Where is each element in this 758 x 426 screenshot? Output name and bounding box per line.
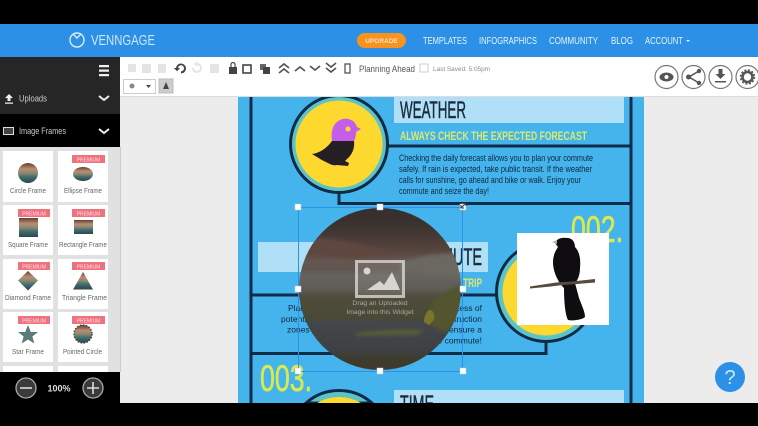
- navigation: TEMPLATES: [423, 35, 467, 47]
- logo: VENNGAGE: [91, 33, 155, 49]
- section 2 heading: COMMUTE: [407, 244, 482, 271]
- photo placeholder: [299, 208, 461, 370]
- icon: hamburger menu: [99, 65, 109, 76]
- image frames row: [0, 114, 120, 147]
- section 3 heading: TIME: [400, 391, 434, 418]
- uploaded bird photo: [517, 233, 609, 325]
- help button: ?: [724, 367, 736, 389]
- card: pointed circle: [58, 312, 108, 362]
- card: triangle frame: Triangle Frame: [62, 293, 107, 302]
- section 2 body text: [281, 303, 483, 346]
- navigation: COMMUNITY: [549, 35, 598, 47]
- card: pointed circle: Pointed Circle: [63, 347, 102, 356]
- card: circle frame: Circle Frame: [10, 186, 46, 195]
- uploads row: [5, 94, 109, 104]
- section 2 body text: truction: [454, 314, 482, 324]
- section 2 body text: ce commute!: [433, 336, 482, 346]
- card: ellipse frame: Ellipse Frame: [64, 186, 102, 195]
- sidebar scrollbar: [120, 147, 121, 372]
- card: rectangle frame: [58, 205, 108, 255]
- section 1 body text: calls for sunshine, go ahead and bike or walk. Enjoy your: [399, 175, 581, 185]
- section 2 body text: Plan: [288, 303, 305, 313]
- image frames row: Image Frames: [19, 126, 66, 137]
- section 1 body text: safely. If rain is expected, take public transit. If the weather: [399, 164, 592, 174]
- infographic: [238, 96, 644, 418]
- card: square frame: Square Frame: [8, 240, 48, 249]
- card: ellipse frame: PREMIUM: [77, 158, 100, 164]
- circle: commute: [495, 250, 585, 343]
- header bar: [0, 24, 758, 57]
- top black letterbox: [0, 0, 758, 24]
- icon: bird: [312, 119, 361, 166]
- section 1 subheading: ALWAYS CHECK THE EXPECTED FORECAST: [400, 129, 587, 143]
- card: triangle frame: [58, 259, 108, 309]
- card: pointed circle: PREMIUM: [77, 318, 100, 324]
- edit icon: [420, 64, 428, 72]
- section 2 body text: to ensure a: [439, 324, 482, 334]
- section 1 heading: weather: [394, 97, 624, 124]
- navigation: [423, 35, 690, 47]
- section 2 subheading: PLAN YOUR TRIP: [412, 276, 482, 290]
- section 3 heading: [394, 390, 624, 403]
- transparency icon: [159, 79, 173, 93]
- canvas background: [120, 97, 758, 403]
- section 1 body text: commute and seize the day!: [399, 186, 489, 196]
- section 2 body text: potential: [281, 314, 313, 324]
- next row cards peek: [3, 366, 108, 372]
- toolbar: [120, 57, 758, 97]
- preview button: [655, 66, 678, 88]
- card: star frame: PREMIUM: [22, 318, 46, 324]
- frames panel: [0, 147, 120, 372]
- circle: time: [306, 390, 372, 403]
- card: square frame: PREMIUM: [22, 212, 46, 218]
- help button: [715, 362, 745, 392]
- sidebar: [0, 57, 121, 403]
- section 2 body text: tess of: [457, 303, 483, 313]
- card: circle frame: [3, 151, 53, 202]
- zoom controls: [0, 372, 120, 403]
- section 1 body text: Checking the daily forecast allows you to plan your commute: [399, 153, 593, 163]
- card: diamond frame: PREMIUM: [22, 264, 46, 270]
- frame lines: [251, 97, 631, 403]
- section 1 body text: [399, 153, 593, 196]
- uploads row: Uploads: [19, 94, 47, 104]
- card: star frame: [3, 312, 53, 362]
- drag hint text: Drag an Uploaded: [352, 300, 408, 307]
- number 003: 003.: [260, 358, 312, 399]
- document title: Planning Ahead: [359, 64, 415, 74]
- drag hint text: [346, 300, 414, 316]
- card: rectangle frame: Rectangle Frame: [59, 240, 107, 249]
- navigation: ACCOUNT: [645, 35, 683, 47]
- last saved text: Last Saved: 5:05pm: [433, 66, 490, 73]
- section 2 heading: [258, 242, 488, 272]
- circle image frame widget: [295, 203, 466, 374]
- circle: weather bird: [290, 96, 388, 192]
- card: star frame: Star Frame: [12, 347, 44, 356]
- upgrade button: [357, 33, 406, 48]
- section 2 body text: zones and: [287, 324, 326, 334]
- navigation: BLOG: [611, 35, 633, 47]
- settings button: [736, 66, 758, 88]
- upgrade button: UPGRADE: [365, 38, 398, 45]
- number 002: 002.: [571, 209, 623, 250]
- card: diamond frame: Diamond Frame: [5, 293, 51, 302]
- bottom black letterbox: [0, 403, 758, 426]
- logo: [70, 33, 155, 49]
- share button: [682, 66, 705, 88]
- card: diamond frame: [3, 259, 53, 309]
- section 1 heading: weather: WEATHER: [400, 97, 466, 124]
- selection box: [295, 203, 466, 374]
- icon: image placeholder: [356, 262, 404, 296]
- drag hint text: Image into this Widget: [346, 309, 414, 316]
- card: triangle frame: PREMIUM: [77, 264, 100, 270]
- card: ellipse frame: [58, 151, 108, 202]
- toolbar icons: [128, 61, 219, 73]
- download button: [709, 66, 732, 88]
- navigation: INFOGRAPHICS: [479, 35, 537, 47]
- layer dropdown: [124, 80, 156, 94]
- zoom controls: 100%: [47, 384, 71, 394]
- card: rectangle frame: PREMIUM: [77, 212, 100, 218]
- card: square frame: [3, 205, 53, 255]
